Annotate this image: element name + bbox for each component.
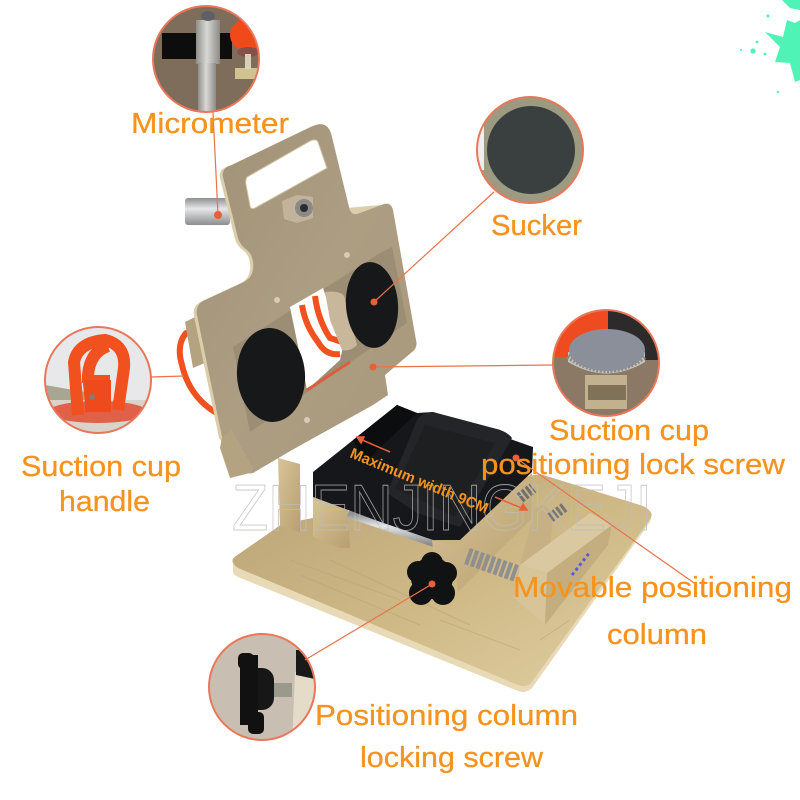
label: micrometer: Micrometer [131,108,289,140]
text: maximum width: Maximum width 9CM [347,445,491,517]
product: tilting gold plate [194,124,416,474]
product: rear upright stand [278,458,300,532]
adjuster nut [282,195,313,223]
label: suction cup positioning lock screw [481,415,786,481]
phone [387,412,512,527]
label: suction cup handle [21,451,181,518]
leader line: micrometer [213,112,222,219]
product: black clamp block with phone [313,405,533,540]
screw heads [274,252,350,423]
product: movable gold plate [432,473,533,592]
product: black locking knob [407,552,457,605]
leader line: locking knob [305,580,436,660]
product: base plate [232,474,652,692]
detail circle: lock screw [552,309,660,417]
label: movable positioning column [513,572,792,651]
label: sucker: Sucker [491,210,582,242]
leader line: lock screw [370,364,553,370]
product: fixed left column [313,497,350,548]
product: rear screw and post [520,488,566,573]
black rail [353,405,417,462]
product: left bracket [185,316,207,368]
annotation: width arrows [357,437,527,510]
label: movable positioning column: Movable positioning [513,572,792,604]
label: suction cup handle: Suction cup [21,451,181,483]
label: positioning column locking screw: locking screw [360,742,544,774]
product: guide rod [348,514,435,544]
label: positioning column locking screw: Positioning column [315,700,578,732]
recessed window [233,247,407,432]
silver cylinder [325,292,357,350]
product: orange suction handle (left) [180,333,222,416]
detail circle: micrometer [152,5,260,113]
product: fixed right column [515,513,612,625]
detail circle: positioning knob [208,633,316,741]
orange handle behind window [302,296,342,354]
product: lower hinge [220,430,253,478]
leader line: suction cup handle [151,376,184,377]
handle opening [246,140,327,209]
label: suction cup positioning lock screw: Suction cup [549,415,709,447]
label: suction cup handle: handle [59,486,150,518]
detail circle: suction cup handle [44,326,152,434]
watermark: ZHENJINGKEJI [232,471,652,544]
label: positioning column locking screw [315,700,578,774]
detail circle: sucker [476,96,584,204]
leader line: sucker [370,192,494,306]
icon: teal ink splash [740,0,800,93]
reflection [307,362,350,390]
product: lead screw spring [467,556,518,574]
left rubber sucker [234,326,308,424]
label: movable positioning column: column [607,619,707,651]
right rubber sucker [343,260,401,350]
leader line: movable column [512,454,697,585]
label: suction cup positioning lock screw: positioning lock screw [481,449,786,481]
product: micrometer barrel [185,198,303,225]
